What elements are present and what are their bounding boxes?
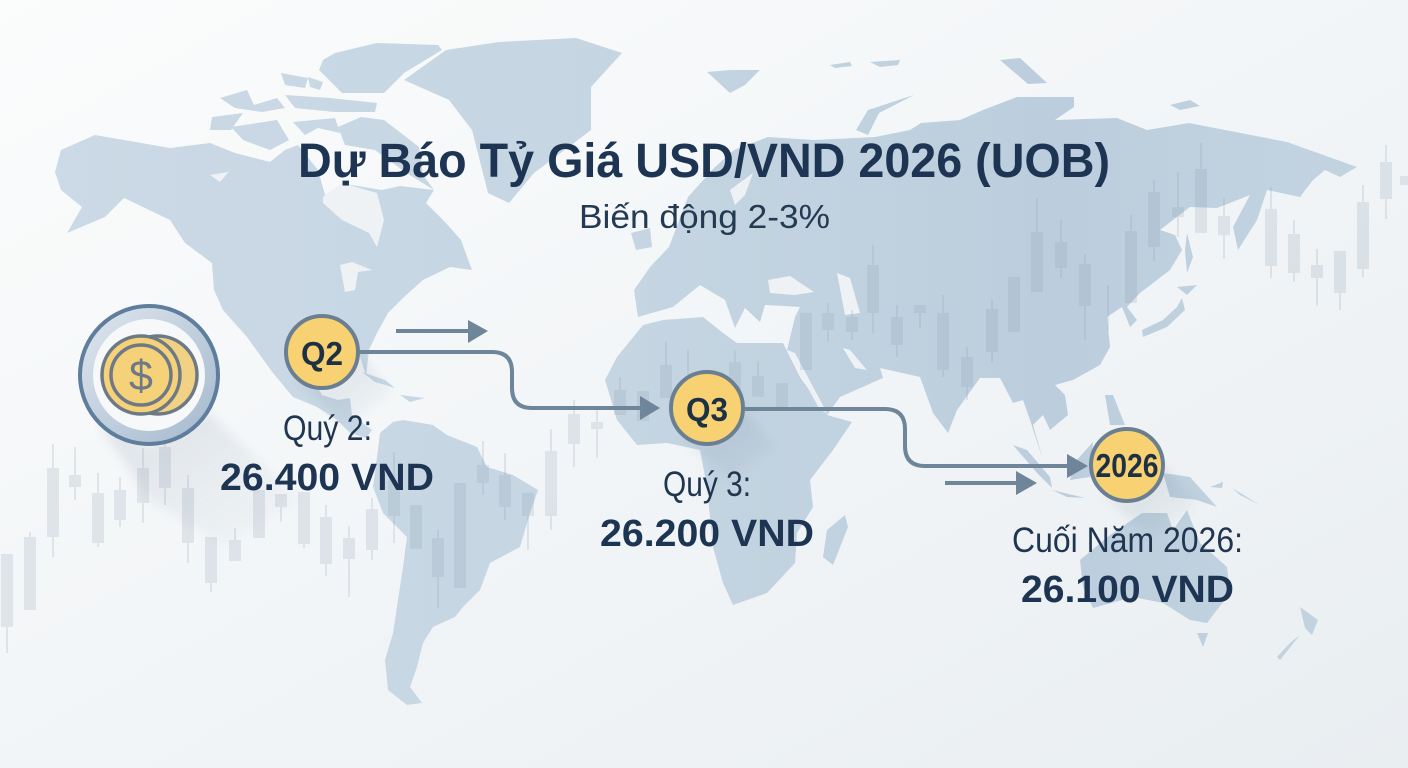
label: year-end 2026 forecast: 26.100 VND — [1021, 569, 1234, 611]
label: Q3 forecast — [600, 465, 814, 555]
label: Q2 forecast: Quý 2: — [283, 409, 372, 448]
marker: 2026 — [1091, 429, 1197, 538]
map: Arctic islands — [210, 43, 442, 190]
marker: Q3 — [671, 372, 777, 481]
map: Caribbean islands — [362, 372, 425, 402]
label: year-end 2026 forecast: Cuối Năm 2026: — [1012, 521, 1243, 560]
map: North America — [55, 135, 472, 438]
map: New Guinea and Pacific islands — [1163, 473, 1260, 507]
map: Greenland — [404, 38, 622, 203]
arrow: Q2 to Q3 connector — [358, 352, 660, 420]
arrow: Q3 to 2026 connector — [745, 409, 1088, 478]
map: Madagascar — [823, 515, 848, 565]
map: Africa — [605, 317, 852, 605]
label: Q2 forecast: 26.400 VND — [220, 457, 434, 499]
label: year-end 2026 forecast — [1012, 521, 1243, 611]
title: Dự Báo Tỷ Giá USD/VND 2026 (UOB) — [298, 135, 1110, 188]
marker: 2026: 2026 — [1096, 447, 1158, 484]
label: Q3 forecast: Quý 3: — [663, 465, 751, 504]
map: Britain — [631, 228, 652, 250]
subtitle: Biến động 2-3% — [579, 198, 830, 235]
map: New Zealand — [1277, 607, 1318, 660]
map: Southeast Asia islands — [1013, 395, 1125, 498]
icon: dollar coins badge: $ — [129, 352, 153, 400]
map: northern islands — [707, 58, 1200, 135]
map: Eurasia — [634, 97, 1357, 460]
map: South America — [373, 420, 538, 705]
label: Q2 forecast — [220, 409, 434, 499]
map: Sakhalin and Japan — [1142, 233, 1197, 337]
candlestick chart background — [1, 143, 1408, 653]
label: Q3 forecast: 26.200 VND — [600, 513, 814, 555]
icon: dollar coins badge — [80, 306, 300, 545]
arrow: upper short arrow — [396, 320, 488, 343]
marker: Q3: Q3 — [686, 391, 728, 428]
arrow: lower short arrow — [945, 471, 1037, 495]
marker: Q2 — [286, 316, 392, 425]
map: Australia — [1080, 510, 1230, 647]
marker: Q2: Q2 — [301, 335, 343, 372]
map: inland seas — [210, 168, 867, 413]
